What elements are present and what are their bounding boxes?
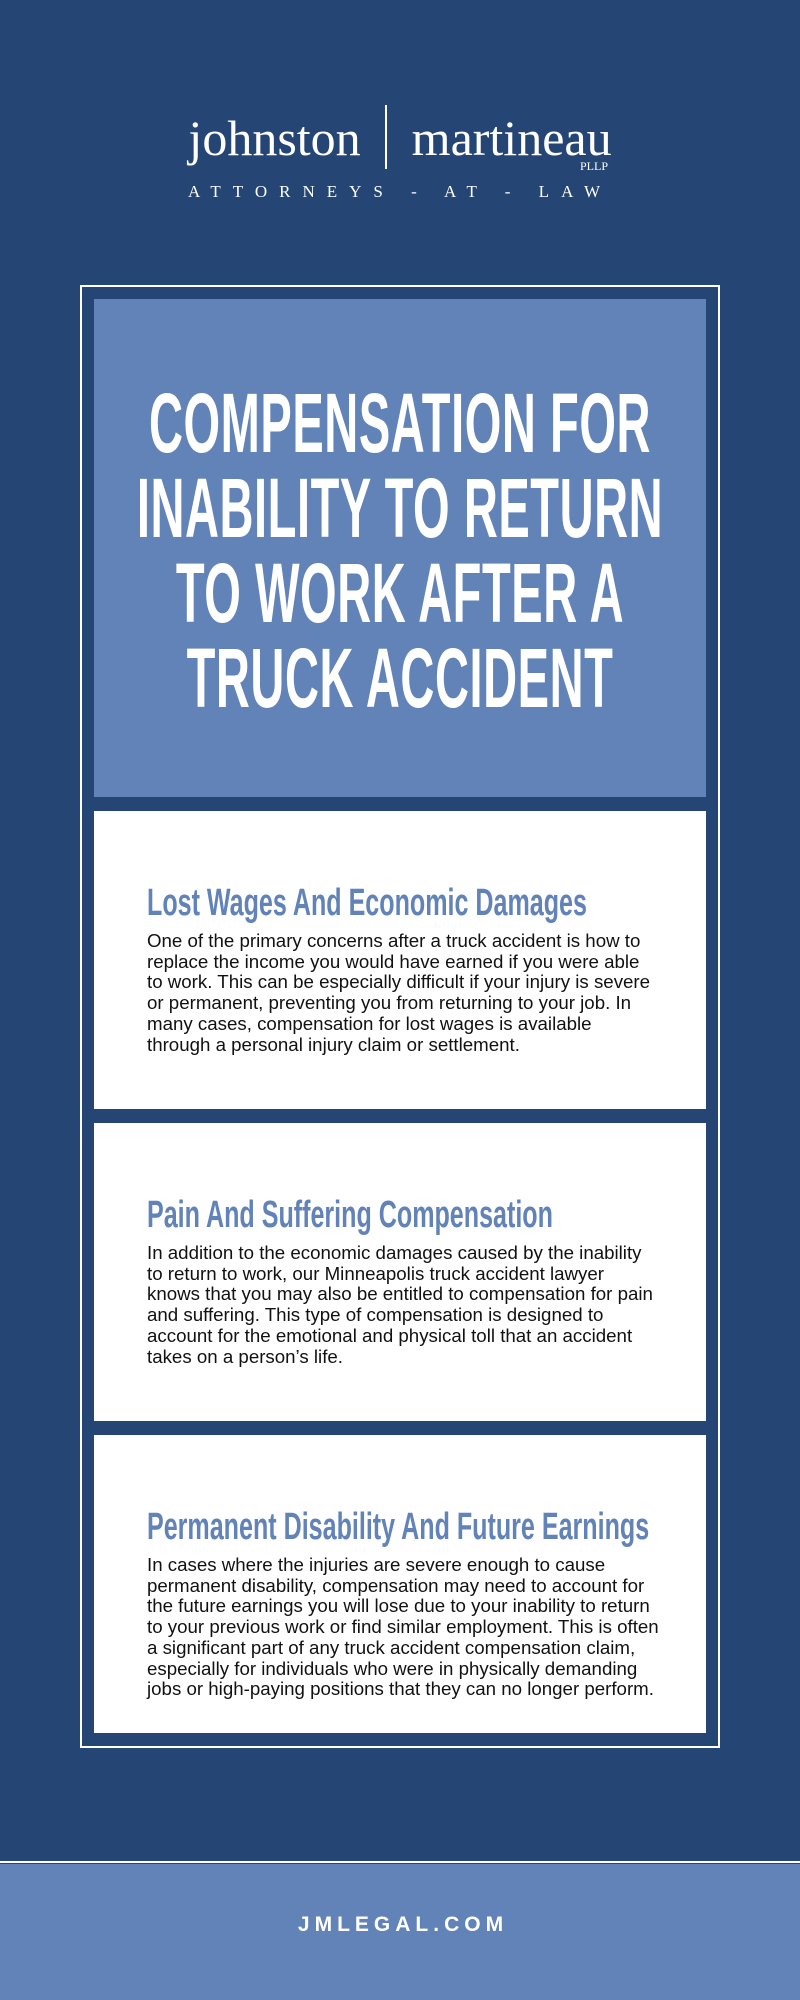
text block: In cases where the injuries are severe enough to cause permanent disability, compensation may need to account for the future earnings you will lose due to your inability to return to your previous work or find similar employment. This is often a significant part of any truck accident compensation claim, especially for individuals who were in physically demanding jobs or high-paying positions that they can no longer perform. bbox=[147, 1554, 659, 1699]
heading: Pain And Suffering Compensation bbox=[147, 1194, 553, 1236]
text block: In addition to the economic damages caused by the inability to return to work, our Minneapolis truck accident lawyer knows that you may also be entitled to compensation for pain and suffering. This type of compensation is designed to account for the emotional and physical toll that an accident takes on a person’s life. bbox=[147, 1242, 653, 1367]
heading: Permanent Disability And Future Earnings bbox=[147, 1506, 649, 1548]
heading: Lost Wages And Economic Damages bbox=[147, 882, 587, 924]
panel: permanent disability bbox=[94, 1435, 706, 1733]
footer line bbox=[0, 1861, 800, 1863]
logo: johnston martineau bbox=[188, 110, 612, 166]
logo: PLLP bbox=[580, 159, 608, 173]
panel: lost wages bbox=[94, 811, 706, 1109]
logo bbox=[186, 105, 612, 201]
title: TRUCK ACCIDENT bbox=[187, 631, 613, 725]
text block: through a personal injury claim or settlement. bbox=[147, 1034, 520, 1055]
outer frame bbox=[80, 285, 720, 1748]
title bbox=[137, 376, 663, 725]
text block: to work. This can be especially difficult if your injury is severe bbox=[147, 971, 650, 992]
text block: or permanent, preventing you from returning to your job. In bbox=[147, 992, 631, 1013]
website: JMLEGAL.COM bbox=[298, 1913, 508, 1936]
footer bbox=[0, 1864, 800, 2000]
title panel bbox=[94, 299, 706, 797]
title: INABILITY TO RETURN bbox=[137, 461, 663, 555]
text block: many cases, compensation for lost wages is available bbox=[147, 1013, 592, 1034]
text block: replace the income you would have earned if you were able bbox=[147, 951, 639, 972]
title: TO WORK AFTER A bbox=[176, 546, 624, 640]
title: COMPENSATION FOR bbox=[149, 376, 651, 470]
text block: One of the primary concerns after a truck accident is how to bbox=[147, 930, 640, 951]
text block bbox=[147, 930, 650, 1055]
panel: pain and suffering bbox=[94, 1123, 706, 1421]
logo: ATTORNEYS - AT - LAW bbox=[188, 182, 612, 201]
